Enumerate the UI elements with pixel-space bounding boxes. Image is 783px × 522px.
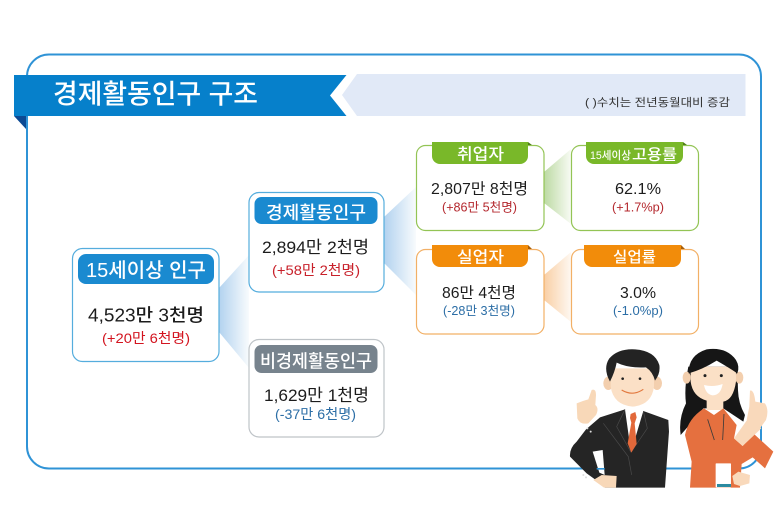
illustration: woman giving thumbs up xyxy=(680,349,773,488)
blouse xyxy=(685,408,773,488)
thumb hand xyxy=(747,391,767,428)
note banner xyxy=(342,74,746,116)
id badge xyxy=(716,463,731,487)
ears xyxy=(683,372,691,384)
banner fold xyxy=(14,116,26,129)
face and neck xyxy=(691,367,736,410)
change: (-1.0%p) xyxy=(613,304,663,318)
title: 경제활동인구 구조 xyxy=(53,80,258,110)
value: 2,807만 8천명 xyxy=(431,180,528,198)
change: (-37만 6천명) xyxy=(275,406,356,422)
thumb hand xyxy=(577,390,598,424)
ears xyxy=(603,377,613,390)
panel: employment rate: 15세이상 xyxy=(590,149,631,162)
heading xyxy=(254,345,378,373)
panel: population 15 and over: 15세이상 인구 xyxy=(86,259,206,282)
note text: ( )수치는 전년동월대비 증감 xyxy=(585,96,730,109)
tie xyxy=(628,412,637,453)
panel: economically inactive population xyxy=(249,340,384,437)
panel: employed: 취업자 xyxy=(457,146,504,164)
title banner xyxy=(14,75,346,129)
lanyard xyxy=(708,414,724,440)
panel: unemployed: 실업자 xyxy=(457,248,504,266)
heading xyxy=(432,142,528,164)
gap between arm and body xyxy=(593,450,605,475)
connector: population to branches xyxy=(219,255,249,368)
panel: economically active population xyxy=(249,192,384,292)
value: 3.0% xyxy=(620,285,656,302)
back hair xyxy=(680,367,745,435)
panel: economically inactive population: 비경제활동인구 xyxy=(260,352,372,372)
change: (+58만 2천명) xyxy=(272,262,360,278)
panel: employed xyxy=(416,142,544,230)
banner ribbon xyxy=(14,75,346,116)
hip hand xyxy=(593,475,617,488)
face xyxy=(611,368,654,407)
jacket xyxy=(570,409,669,488)
panel: employment rate xyxy=(572,142,698,230)
hip hand xyxy=(732,472,750,486)
panel: unemployed xyxy=(416,245,544,334)
heading xyxy=(254,197,378,224)
change: (+86만 5천명) xyxy=(442,200,517,214)
heading xyxy=(432,245,528,267)
change: (-28만 3천명) xyxy=(443,303,515,318)
change: (+1.7%p) xyxy=(612,200,664,214)
eyes and mouth xyxy=(621,377,624,380)
panel: unemployment rate xyxy=(572,245,698,334)
panel: economically active population: 경제활동인구 xyxy=(266,203,366,223)
value: 86만 4천명 xyxy=(442,284,516,302)
heading xyxy=(584,245,681,267)
panel: employment rate: 고용률 xyxy=(632,146,677,164)
raised forearm xyxy=(734,415,761,446)
hair xyxy=(606,349,660,382)
cuff buttons xyxy=(583,428,591,477)
illustration: man giving thumbs up xyxy=(570,349,669,488)
neck and shirt xyxy=(623,395,644,453)
frame line seen through the gap xyxy=(597,468,605,470)
fringe xyxy=(689,349,738,373)
value: 62.1% xyxy=(615,181,661,198)
eyes and smile xyxy=(703,374,706,377)
connector: employed to employment rate xyxy=(544,149,571,224)
value: 4,523만 3천명 xyxy=(88,306,204,326)
panel: population 15 and over xyxy=(72,248,219,362)
panel: unemployment rate: 실업률 xyxy=(613,249,656,266)
change: (+20만 6천명) xyxy=(102,330,190,346)
lapels xyxy=(603,409,647,475)
heading xyxy=(586,142,683,164)
connector: unemployed to unemployment rate xyxy=(544,252,571,322)
value: 1,629만 1천명 xyxy=(264,386,369,405)
heading xyxy=(78,254,214,284)
outer frame xyxy=(27,54,761,468)
value: 2,894만 2천명 xyxy=(262,238,369,257)
connector: economically active to employed and unemployed xyxy=(384,187,416,295)
